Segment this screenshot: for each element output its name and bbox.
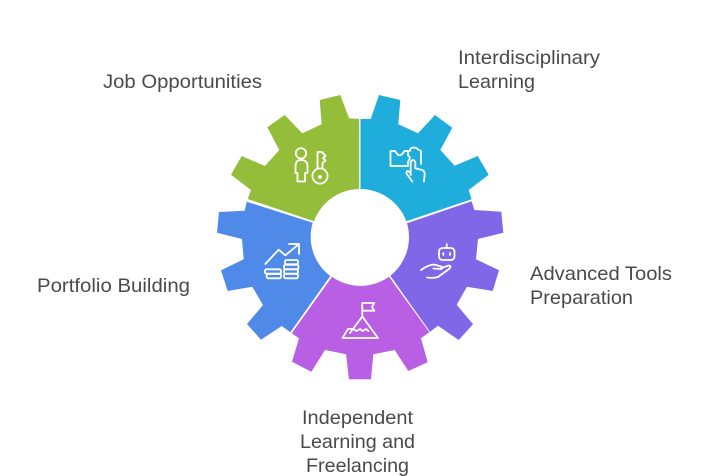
label: interdisciplinary learning: Learning — [458, 71, 535, 93]
gear segment: portfolio building (blue) — [217, 202, 330, 340]
icon: mountain with flag — [342, 303, 378, 338]
label: interdisciplinary learning — [458, 47, 600, 93]
label: independent learning and freelancing — [300, 407, 415, 476]
label: independent learning and freelancing: Independent — [302, 407, 414, 429]
label: advanced tools preparation: Preparation — [530, 287, 633, 309]
gear segment: interdisciplinary learning (cyan) — [360, 95, 489, 221]
label: advanced tools preparation — [530, 263, 672, 309]
label: portfolio building: Portfolio Building — [37, 275, 190, 297]
gear segment: independent learning and freelancing (purple) — [292, 277, 429, 379]
label: advanced tools preparation: Advanced Tools — [530, 263, 672, 285]
label: independent learning and freelancing: Learning and — [300, 431, 415, 453]
label: job opportunities: Job Opportunities — [103, 71, 262, 93]
icon: growth arrow and coin stacks — [265, 244, 299, 278]
label: interdisciplinary learning: Interdisciplinary — [458, 47, 600, 69]
icon: puzzle and pointing hand — [390, 148, 425, 182]
gear segment: advanced tools preparation (violet) — [390, 201, 503, 340]
icon: person and key — [296, 148, 328, 184]
icon: robot on open hand — [421, 244, 454, 278]
gear segment: job opportunities (green) — [231, 95, 359, 221]
